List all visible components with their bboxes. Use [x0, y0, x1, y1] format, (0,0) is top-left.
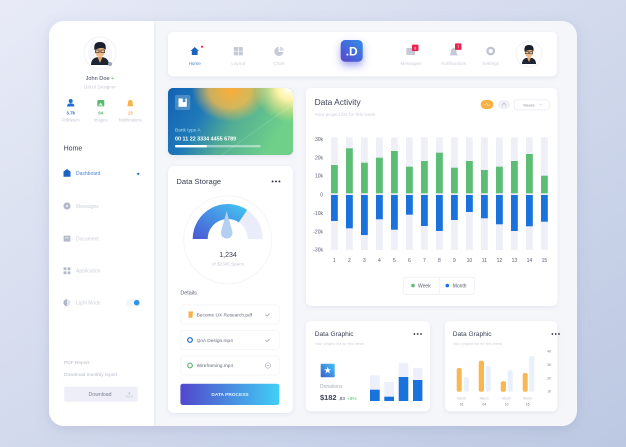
panel: data graphic donations: [306, 321, 430, 411]
subheading: Your project list for this week: [453, 341, 502, 346]
x axis labels: 10: [467, 258, 472, 264]
bar chart tracks: [331, 137, 548, 250]
card type: Bank type A: [175, 128, 201, 134]
chart toggle orange: [481, 100, 493, 109]
nav: chart: [273, 47, 285, 66]
donations value: $182 ,93 +8%: [320, 393, 357, 402]
nav item: messages: [63, 202, 99, 210]
logo: .D: [346, 44, 358, 58]
y axis labels: -10k: [313, 211, 323, 217]
y axis labels: -30k: [313, 248, 323, 254]
nav item: application: Application: [76, 269, 101, 275]
data process button: DATA PROCESS: [211, 392, 249, 398]
stat: followers: Followers: [62, 118, 80, 123]
panel: data graphic bars: [445, 321, 560, 411]
panel: top navigation: [168, 32, 557, 76]
nav item: document: [64, 236, 99, 243]
card number: 00 11 22 3334 4455 6789: [175, 137, 236, 143]
file row: qna: QnA Design.mp4: [197, 338, 233, 344]
dashboard frame: [49, 21, 577, 426]
x axis labels: 15: [542, 258, 547, 264]
x axis labels: 1: [333, 258, 336, 264]
nav: notifications: Notifications: [441, 61, 467, 66]
x axis labels: [457, 397, 533, 401]
logo: [341, 40, 363, 62]
star icon: [321, 364, 335, 377]
x axis labels: 11: [482, 258, 487, 264]
orange bars: [457, 361, 528, 392]
nav item: document: Document: [76, 237, 99, 243]
subheading: Your project list for this week: [315, 341, 364, 346]
stat: images: 64: [98, 111, 104, 116]
x axis labels: 9: [453, 258, 456, 264]
y axis labels: -20k: [313, 230, 323, 236]
heading: Data Storage: [176, 177, 221, 186]
header avatar: [516, 41, 542, 67]
nav item: messages: Messages: [76, 204, 99, 210]
profile role: UI/UX Designer: [84, 85, 116, 90]
x axis labels: 5: [393, 258, 396, 264]
nav item: light mode: [63, 299, 101, 307]
x axis labels: 6: [408, 258, 411, 264]
y axis labels: [313, 137, 323, 254]
bars: month: [331, 195, 548, 235]
x axis labels: March: [502, 397, 512, 401]
x axis labels: March: [480, 397, 489, 401]
donations label: Donations: [320, 384, 343, 390]
stat: images: [94, 100, 108, 123]
y axis labels: [547, 350, 552, 394]
stat: images: Images: [94, 118, 108, 123]
y axis labels: 0: [320, 192, 323, 198]
nav item: dashboard: [64, 169, 139, 177]
x axis dates: 16: [526, 402, 530, 406]
data process button: [180, 384, 279, 405]
panel: data storage: [168, 166, 293, 413]
nav: home: [189, 46, 203, 66]
nav: settings: Settings: [482, 61, 500, 66]
toggle switch: [126, 299, 140, 306]
stat: notifications: 13: [128, 111, 133, 116]
sidebar heading: Home: [64, 145, 82, 152]
legend: [403, 277, 474, 294]
menu dots: [414, 333, 422, 335]
file row: research: [181, 305, 279, 324]
subheading: Your project list for this week: [315, 112, 376, 118]
nav: home: Home: [189, 61, 201, 66]
gauge: [184, 196, 272, 284]
menu dots: [272, 180, 280, 182]
y axis labels: 20k: [315, 155, 323, 161]
menu dots: [552, 333, 560, 335]
light blue bars: [464, 356, 534, 392]
profile name: John Doe +: [86, 76, 114, 82]
nav item: application: [64, 267, 101, 275]
y axis labels: 2K: [547, 376, 552, 380]
weeks dropdown: [514, 100, 549, 110]
nav: messages: 8: [414, 46, 416, 50]
pdf report text: Download monthly report: [64, 372, 118, 378]
nav: messages: [401, 45, 422, 66]
chart toggle grey: [498, 100, 510, 109]
y axis labels: 30k: [315, 137, 323, 143]
heading: Data Graphic: [315, 331, 354, 338]
download button: Download: [88, 392, 112, 398]
y axis labels: 4K: [547, 350, 552, 354]
card chip icon: [175, 95, 190, 110]
nav: settings: [482, 48, 500, 66]
gauge: 1,234: [219, 252, 237, 259]
bar chart: donations: [370, 363, 422, 401]
nav item: light mode: Light Mode: [76, 301, 101, 307]
pdf report text: [64, 360, 118, 378]
x axis labels: 4: [378, 258, 381, 264]
card progress: [175, 145, 261, 147]
x axis dates: 01: [460, 402, 464, 406]
nav: notifications: [441, 43, 467, 66]
gauge: of $2345 Space: [212, 261, 245, 266]
nav: messages: Messages: [401, 61, 422, 66]
y axis labels: 1K: [547, 390, 552, 394]
file row: research: Become UX Research.pdf: [197, 312, 253, 318]
nav: layout: Layout: [231, 61, 246, 66]
panel: sidebar: [62, 37, 142, 402]
x axis labels: 3: [363, 258, 366, 264]
pdf report text: PDF Report: [64, 360, 90, 366]
x axis labels: 14: [527, 258, 532, 264]
x axis labels: 12: [497, 258, 502, 264]
heading: Data Graphic: [453, 331, 492, 338]
heading: Data Activity: [315, 97, 361, 107]
panel: data activity: [306, 88, 558, 306]
legend: Week: [418, 283, 431, 289]
stat: notifications: [119, 100, 142, 123]
x axis labels: 8: [438, 258, 441, 264]
download button: [64, 387, 138, 402]
panel: bank card: [168, 88, 293, 156]
stat: notifications: Notifications: [119, 118, 142, 123]
x axis labels: 2: [348, 258, 351, 264]
bars: week: [331, 148, 548, 193]
x axis labels: 13: [512, 258, 517, 264]
file row: wireframing: [181, 356, 279, 375]
x axis labels: March: [457, 397, 467, 401]
x axis labels: [333, 258, 547, 264]
nav: chart: Chart: [273, 61, 285, 66]
x axis dates: 10: [505, 402, 509, 406]
stat: followers: [62, 99, 80, 123]
file row: qna: [181, 331, 279, 349]
y axis labels: 3K: [547, 363, 552, 367]
x axis labels: March: [523, 397, 533, 401]
x axis dates: [460, 402, 530, 406]
profile avatar: [84, 37, 116, 69]
stat: followers: 3.7k: [66, 111, 76, 116]
weeks dropdown: Weeks: [523, 103, 535, 107]
legend: Month: [453, 283, 467, 289]
nav: notifications: 7: [457, 45, 459, 49]
details heading: Details: [180, 291, 197, 297]
y axis labels: 10k: [315, 173, 323, 179]
x axis dates: 04: [482, 402, 486, 406]
file row: wireframing: Wireframing.mp4: [197, 363, 233, 369]
nav item: dashboard: Dashboard: [76, 171, 101, 177]
x axis labels: 7: [423, 258, 426, 264]
nav: layout: [231, 47, 246, 66]
